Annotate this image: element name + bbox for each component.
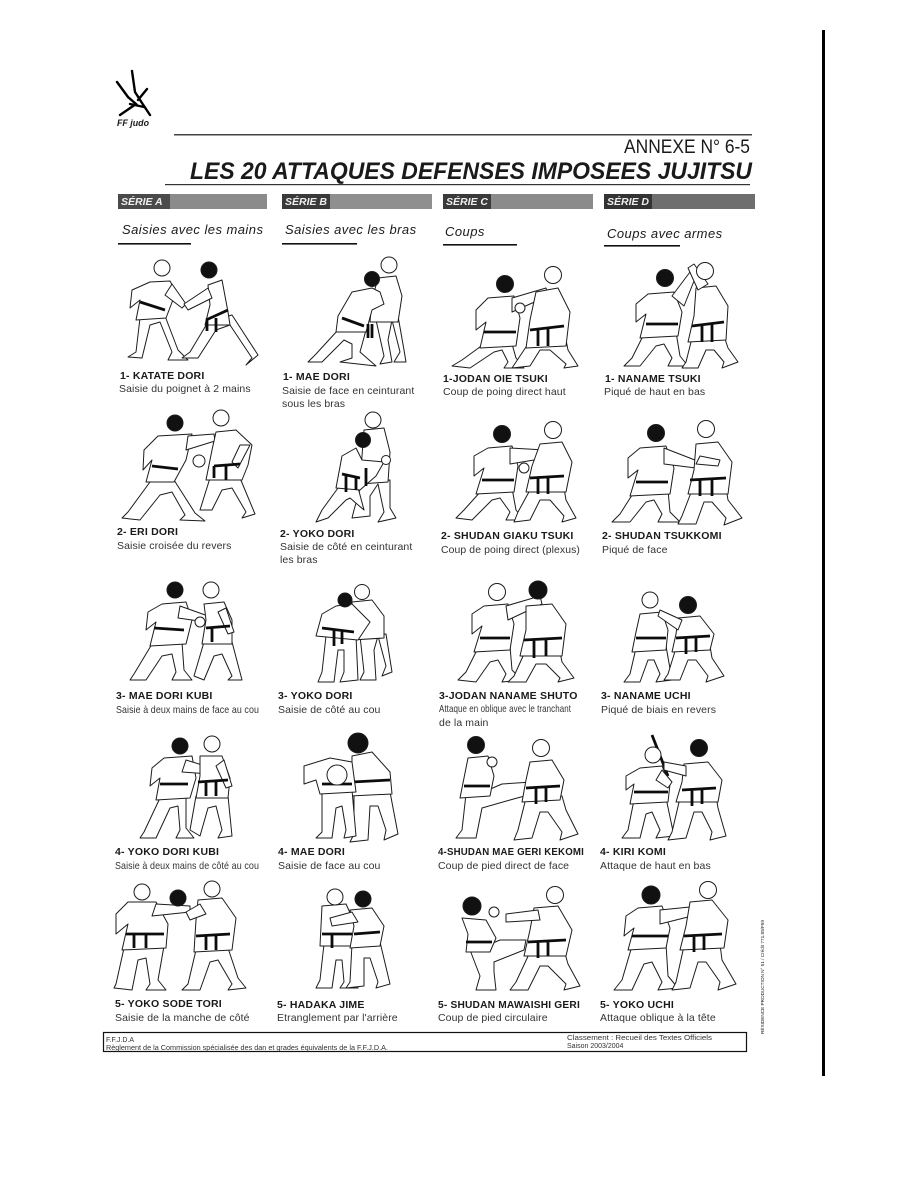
logo: FF judo bbox=[117, 71, 150, 129]
caption A1: 1- KATATE DORI bbox=[120, 370, 204, 382]
caption C5 bbox=[438, 999, 580, 1024]
caption C4: Coup de pied direct de face bbox=[438, 860, 569, 872]
caption B2: Saisie de côté en ceinturant bbox=[280, 541, 412, 553]
caption B2 bbox=[280, 528, 412, 566]
title underline bbox=[165, 184, 750, 185]
figure D4 bbox=[622, 735, 726, 840]
figure D2 bbox=[612, 420, 742, 525]
caption D2 bbox=[602, 530, 722, 556]
figure A4 bbox=[140, 736, 232, 838]
caption B5: 5- HADAKA JIME bbox=[277, 999, 365, 1011]
caption B1: 1- MAE DORI bbox=[283, 371, 350, 383]
footer box: Saison 2003/2004 bbox=[567, 1043, 624, 1050]
footer box: Classement : Recueil des Textes Officiels bbox=[567, 1035, 713, 1042]
figure C4 bbox=[456, 736, 578, 840]
logo: FF judo: FF judo bbox=[117, 118, 149, 129]
caption D4: Attaque de haut en bas bbox=[600, 860, 711, 872]
figure C5 bbox=[462, 886, 580, 990]
caption A5 bbox=[115, 998, 250, 1024]
caption B2: les bras bbox=[280, 554, 318, 566]
caption C1: Coup de poing direct haut bbox=[443, 386, 566, 398]
caption B5: Etranglement par l'arrière bbox=[277, 1012, 398, 1024]
figure D3 bbox=[624, 592, 724, 682]
caption A3: Saisie à deux mains de face au cou bbox=[116, 704, 259, 716]
caption A3 bbox=[116, 690, 259, 716]
caption D5 bbox=[600, 999, 716, 1024]
caption B3: Saisie de côté au cou bbox=[278, 704, 381, 716]
caption C3: 3-JODAN NANAME SHUTO bbox=[439, 690, 578, 702]
caption D4: 4- KIRI KOMI bbox=[600, 846, 666, 858]
footer box: F.F.J.D.A bbox=[106, 1037, 134, 1044]
caption B4: Saisie de face au cou bbox=[278, 860, 381, 872]
series bar D: SÉRIE D bbox=[607, 195, 649, 208]
series bar A: SÉRIE A bbox=[121, 195, 163, 208]
annex label: ANNEXE N° 6-5 bbox=[624, 137, 750, 158]
column heading C bbox=[443, 224, 517, 246]
caption D1: 1- NANAME TSUKI bbox=[605, 373, 701, 385]
figure C2 bbox=[456, 422, 576, 522]
right margin black bar bbox=[822, 30, 825, 1076]
column heading B: Saisies avec les bras bbox=[285, 222, 417, 237]
caption C4: 4-SHUDAN MAE GERI KEKOMI bbox=[438, 846, 584, 858]
caption B5 bbox=[277, 999, 398, 1024]
caption C3: Attaque en oblique avec le tranchant bbox=[439, 703, 571, 715]
caption D3: Piqué de biais en revers bbox=[601, 704, 716, 716]
caption C2: 2- SHUDAN GIAKU TSUKI bbox=[441, 530, 574, 542]
figure A3 bbox=[130, 582, 242, 680]
caption A2: Saisie croisée du revers bbox=[117, 540, 231, 552]
figure B3 bbox=[316, 584, 392, 682]
caption A5: Saisie de la manche de côté bbox=[115, 1012, 250, 1024]
caption B1: Saisie de face en ceinturant bbox=[282, 385, 414, 397]
caption D2: 2- SHUDAN TSUKKOMI bbox=[602, 530, 722, 542]
caption C1: 1-JODAN OIE TSUKI bbox=[443, 373, 548, 385]
caption A1 bbox=[119, 370, 251, 395]
series bar B: SÉRIE B bbox=[285, 195, 327, 208]
caption A5: 5- YOKO SODE TORI bbox=[115, 998, 222, 1010]
caption D4 bbox=[600, 846, 711, 872]
caption B4: 4- MAE DORI bbox=[278, 846, 345, 858]
caption C3: de la main bbox=[439, 717, 489, 729]
caption D3: 3- NANAME UCHI bbox=[601, 690, 691, 702]
caption A4 bbox=[115, 846, 259, 872]
caption C3 bbox=[439, 690, 578, 729]
caption B3 bbox=[278, 690, 381, 716]
caption B1 bbox=[282, 371, 414, 410]
column heading A: Saisies avec les mains bbox=[122, 222, 263, 237]
caption D5: Attaque oblique à la tête bbox=[600, 1012, 716, 1024]
series bar B bbox=[282, 194, 432, 209]
title: LES 20 ATTAQUES DEFENSES IMPOSEES JUJITSU bbox=[190, 158, 753, 185]
caption C4 bbox=[438, 846, 584, 872]
column heading C: Coups bbox=[445, 224, 485, 239]
figure C3 bbox=[458, 581, 574, 682]
figure A5 bbox=[114, 881, 246, 990]
caption C5: Coup de pied circulaire bbox=[438, 1012, 548, 1024]
caption B4 bbox=[278, 846, 381, 872]
caption B2: 2- YOKO DORI bbox=[280, 528, 355, 540]
header rule bbox=[174, 134, 752, 136]
series bar C: SÉRIE C bbox=[446, 195, 488, 208]
caption B3: 3- YOKO DORI bbox=[278, 690, 353, 702]
figure B4 bbox=[304, 733, 398, 842]
figure B1 bbox=[308, 257, 406, 366]
caption D1 bbox=[604, 373, 705, 398]
figure C1 bbox=[452, 266, 578, 368]
figure B2 bbox=[316, 412, 396, 522]
series bar A bbox=[118, 194, 267, 209]
figure B5 bbox=[316, 889, 390, 988]
caption B1: sous les bras bbox=[282, 398, 345, 410]
series bar D bbox=[604, 194, 755, 209]
caption A2 bbox=[117, 526, 231, 552]
caption C2: Coup de poing direct (plexus) bbox=[441, 544, 580, 556]
caption A2: 2- ERI DORI bbox=[117, 526, 178, 538]
caption A1: Saisie du poignet à 2 mains bbox=[119, 383, 251, 395]
figure A2 bbox=[122, 410, 255, 521]
caption D1: Piqué de haut en bas bbox=[604, 386, 705, 398]
caption D5: 5- YOKO UCHI bbox=[600, 999, 674, 1011]
caption D3 bbox=[601, 690, 716, 716]
caption C1 bbox=[443, 373, 566, 398]
caption A4: 4- YOKO DORI KUBI bbox=[115, 846, 219, 858]
caption D2: Piqué de face bbox=[602, 544, 668, 556]
footer box bbox=[104, 1032, 746, 1052]
caption A4: Saisie à deux mains de côté au cou bbox=[115, 860, 259, 872]
figure D1 bbox=[624, 262, 738, 368]
figure D5 bbox=[614, 882, 736, 990]
footer box: Règlement de la Commission spécialisée des dan et grades équivalents de la F.F.J.D.A. bbox=[106, 1045, 388, 1052]
vertical side credit: RÉSIDENCE PRODUCTION N° 51 / Crédit 771.89/F59 bbox=[759, 919, 765, 1034]
figure A1 bbox=[128, 260, 258, 365]
caption C5: 5- SHUDAN MAWAISHI GERI bbox=[438, 999, 580, 1011]
caption A3: 3- MAE DORI KUBI bbox=[116, 690, 213, 702]
series bar C bbox=[443, 194, 593, 209]
caption C2 bbox=[441, 530, 580, 556]
column heading D: Coups avec armes bbox=[607, 226, 723, 241]
column heading B bbox=[282, 222, 417, 245]
